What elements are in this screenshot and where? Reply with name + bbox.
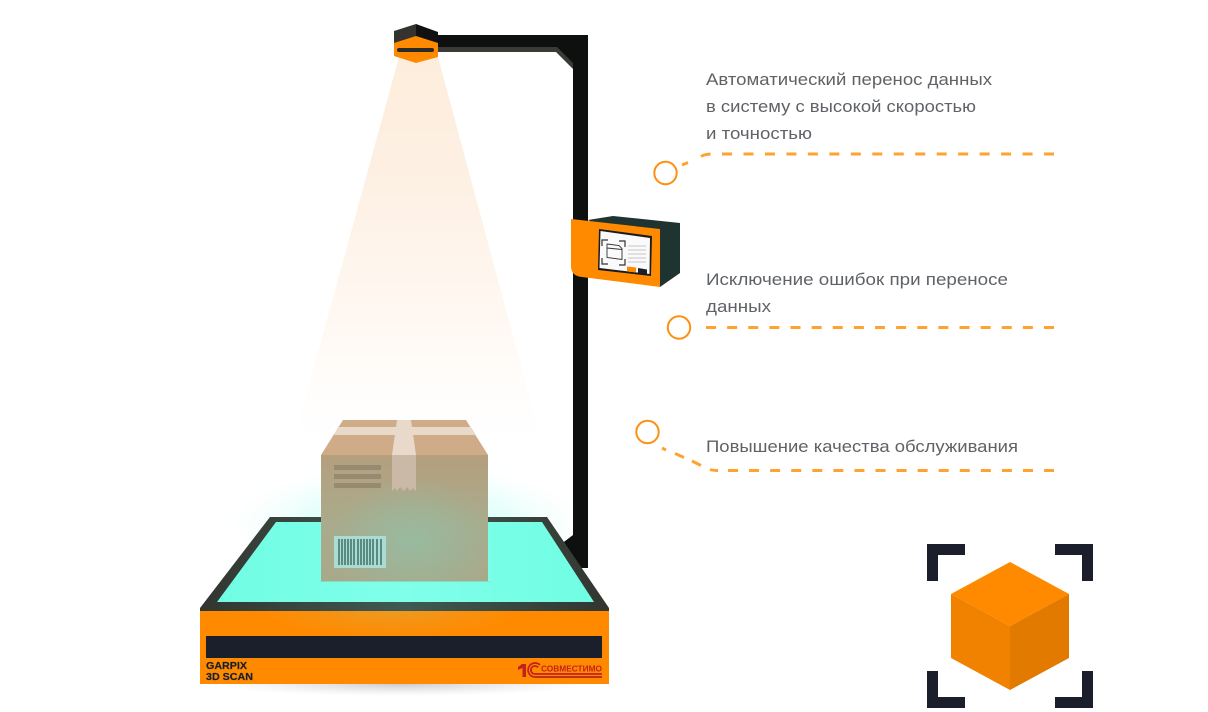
platform orange base [200, 611, 609, 684]
cube [951, 562, 1069, 690]
benefit 2 [668, 270, 1054, 339]
scanning platform [200, 517, 609, 611]
touchscreen terminal [571, 216, 680, 287]
benefit 1 [654, 70, 1054, 184]
benefit 3 text: Повышение качества обслуживания [706, 437, 1018, 456]
brand label second line: 3D SCAN [206, 672, 253, 683]
benefit 2 text: Исключение ошибок при переносе [706, 270, 1008, 289]
benefit 2 text: данных [706, 297, 772, 316]
benefit 1 text: в систему с высокой скоростью [706, 97, 976, 116]
benefit 3 [636, 421, 1054, 470]
packing tape [334, 420, 476, 491]
1C compatible logo: СОВМЕСТИМО [541, 664, 602, 674]
barcode [334, 536, 386, 568]
cardboard box [319, 420, 491, 582]
benefit 1 marker [654, 162, 677, 184]
3D scan icon [927, 544, 1093, 708]
benefit 1 text: и точностью [706, 124, 812, 143]
benefit 1 text: Автоматический перенос данных [706, 70, 993, 89]
handling marks [334, 465, 381, 488]
benefit 3 marker [636, 421, 659, 443]
brand label: GARPIX [206, 661, 247, 672]
overhead camera [394, 24, 438, 63]
light beam from camera [294, 57, 541, 440]
display strip [206, 636, 602, 658]
base shadow [215, 672, 585, 696]
benefit 2 marker [668, 316, 690, 339]
benefit 2 leader line [706, 326, 1054, 329]
scan frame brackets [927, 544, 1093, 708]
teal glow above platform [228, 463, 588, 587]
scanner pole arm [436, 35, 588, 568]
benefit 1 leader line [682, 154, 1054, 165]
benefit 3 leader line [662, 448, 1054, 470]
1C compatible logo [518, 663, 602, 677]
